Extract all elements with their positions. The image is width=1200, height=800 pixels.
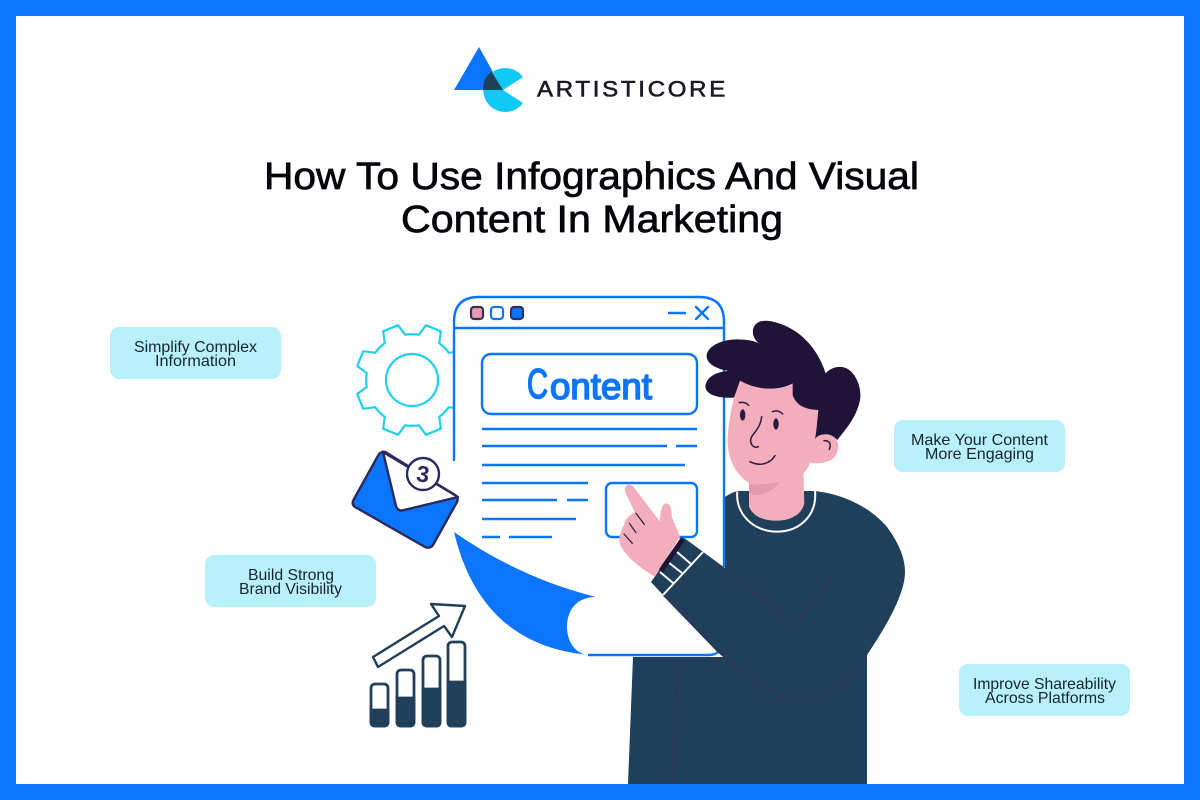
- window minimise and close controls: [669, 307, 708, 319]
- callout: make your content more engaging: More Engaging: [925, 446, 1034, 463]
- window buttons: [471, 307, 523, 319]
- face and ear: [728, 378, 838, 485]
- callout: simplify complex information: [110, 327, 281, 379]
- content heading box: [482, 354, 697, 414]
- person torso: [628, 491, 905, 784]
- page curl: [454, 532, 719, 655]
- rising arrow: [373, 604, 465, 667]
- callout: build strong brand visibility: Brand Visibility: [239, 581, 342, 598]
- title: [264, 156, 919, 241]
- content heading box: C: [527, 360, 548, 407]
- title: Content In Marketing: [401, 199, 783, 241]
- sweater arm: [651, 537, 867, 701]
- icon: growth chart: [371, 604, 465, 726]
- logo: [454, 47, 728, 112]
- callout: improve shareability across platforms: Across Platforms: [985, 690, 1105, 707]
- neck: [749, 470, 804, 521]
- hand: [619, 485, 683, 577]
- callout: simplify complex information: Simplify Complex: [134, 339, 257, 356]
- face details: [739, 402, 830, 464]
- head, neck and hand: [619, 321, 860, 577]
- icon: envelope: [353, 452, 458, 548]
- collar: [737, 491, 815, 532]
- callout: build strong brand visibility: [205, 555, 376, 607]
- sweater seams: [663, 573, 867, 783]
- icon: envelope: 3: [415, 460, 431, 488]
- title: How To Use Infographics And Visual: [264, 156, 919, 198]
- callout: simplify complex information: Information: [155, 353, 236, 370]
- bars: [371, 642, 465, 726]
- logo: ARTISTICORE: [537, 76, 728, 102]
- hair: [705, 321, 860, 440]
- icon: gear: [353, 321, 471, 439]
- callout: improve shareability across platforms: Improve Shareability: [973, 676, 1116, 693]
- callout: make your content more engaging: Make Your Content: [911, 432, 1049, 449]
- browser window: [454, 297, 724, 655]
- callout: make your content more engaging: [894, 420, 1065, 472]
- person: [619, 321, 867, 783]
- text lines: [482, 429, 697, 537]
- callout: build strong brand visibility: Build Strong: [248, 567, 334, 584]
- cuff stripes: [660, 552, 703, 595]
- callout: improve shareability across platforms: [959, 664, 1130, 716]
- call to action button: [606, 483, 697, 537]
- neck shadow: [749, 481, 780, 495]
- content heading box: ontent: [550, 366, 653, 407]
